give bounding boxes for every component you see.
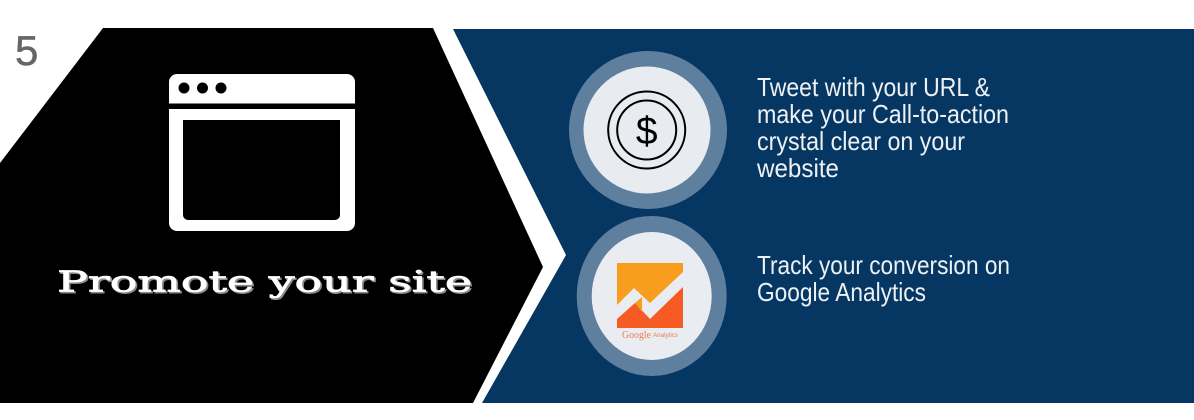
text block: track conversion: Track your conversion on bbox=[757, 250, 1010, 280]
text block: track conversion bbox=[757, 250, 1010, 307]
heading: Promote your site: Promote your site bbox=[58, 266, 474, 300]
text block: tweet call-to-action bbox=[756, 72, 1009, 183]
heading: Promote your site bbox=[57, 264, 474, 300]
icon: Google Analytics circle bbox=[577, 216, 727, 376]
text block: tweet call-to-action: make your Call-to-action bbox=[757, 99, 1009, 129]
icon: coin circle: $ bbox=[636, 110, 658, 153]
panel: black hexagon bbox=[0, 28, 543, 403]
icon: coin circle bbox=[569, 51, 727, 209]
icon: browser window bbox=[169, 74, 355, 231]
step number: 5 bbox=[15, 27, 38, 74]
panel: blue content area bbox=[453, 29, 1194, 403]
text block: tweet call-to-action: crystal clear on your bbox=[757, 126, 965, 156]
icon: Google Analytics circle: Analytics bbox=[653, 333, 678, 339]
text block: track conversion: Google Analytics bbox=[757, 277, 926, 307]
text block: tweet call-to-action: Tweet with your URL & bbox=[757, 72, 990, 102]
heading: Promote your site: Promote your site bbox=[57, 264, 472, 298]
icon: Google Analytics circle: Google bbox=[622, 330, 652, 341]
text block: tweet call-to-action: website bbox=[756, 153, 839, 183]
